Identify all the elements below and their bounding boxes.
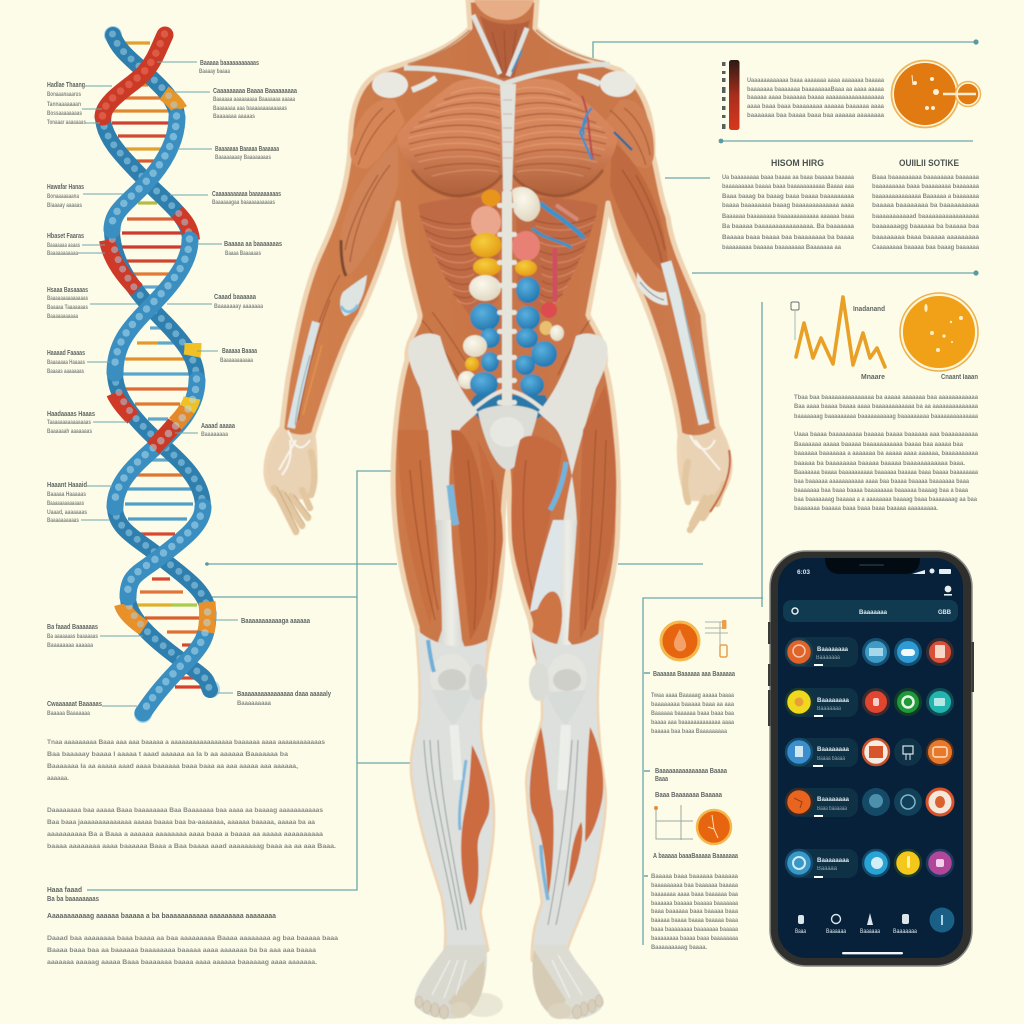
femur straps [432,520,585,665]
right paragraphs: baaaaaa baaaaaaa a aaaaaaa ba aaaaa aaaa aaaaaa, baaaaaaaaaa [794,450,978,457]
bottom navigation [795,908,954,935]
bottom navigation: Baaa [795,929,807,935]
DNA labels right: Baaaaa baaaaaaaaaaas [200,60,259,67]
two column text: baaaaaaaa baaa baaaaa aaaaaaaaa [872,234,979,241]
lower left note: Baaaa baaa baa aa baaaaaa baaaaaaaa baaaaa aaaa aaaaaaa ba ba aaa aaa baaaa [47,947,316,954]
DNA labels left: Biaaaay aaaaas [47,202,82,209]
DNA labels right: Baaaaaaaaaaa [220,357,253,364]
right paragraphs: Uaaa baaaa baaaaaaaaa baaaaa baaaa baaaaaa aaa baaaaaaaaaa [794,431,978,438]
DNA labels right: Baaaay baaaa [199,68,230,75]
DNA labels left: Tannaaaaaaan [47,101,81,108]
app row 2: Baaaaaaaa [817,698,850,704]
DNA labels right: Baaaa Baaaaaas [225,250,261,257]
DNA labels left: Baaaaaaa aaaas [47,242,80,249]
lower left note: Ba ba baaaaaaaas [47,896,99,903]
two column text: Ba baaaaa baaaaaaaaaaaaaaaa. Ba baaaaaaa [722,223,854,230]
app row 1: Baaaaaaaa [817,647,849,653]
left body paragraphs: Baa baaa jaaaaaaaaaaaaaa aaaaa baaaa baa ba-aaaaaaa, aaaaaa baaaaa, aaaaa ba aa [47,819,315,826]
middle column upper panel: baaaa aaa baaaaaaaaaaaaa aaaa [651,719,734,726]
lower left note: aaaaaaa aaaaag aaaaa Baaa baaaaaaa baaaa aaaa aaaaaa baaaaaag aaaa aaaaaaa. [47,959,317,966]
DNA labels left: Uaaad, aaaaaaas [47,509,87,516]
two column text: Ua baaaaaaaa baaa baaaa aa baaa baaaaa baaaaa [722,174,854,181]
DNA labels left: Taaaaaaaaaaaaaaas [47,419,91,426]
left body paragraphs: Tnaa aaaaaaaaa Baaa aaa aaa baaaaa a aaaaaaaaaaaaaaaaa baaaaaa aaaa aaaaaaaaaaaas [47,739,325,746]
middle column upper panel: baaaaa baa baaa Baaaaaaaaa [651,728,727,735]
bottom navigation: Baaaaaa [826,929,847,935]
app row 3 [786,738,953,767]
two column text: baaaaaaaaa baaaa baaa baaaaaaaaaaa Baaaa aaa [722,183,854,190]
axes chart [656,805,693,840]
smartphone: GBB [938,610,952,616]
app row 4 [786,788,953,817]
app row 1: Baaaaaaa [816,655,841,661]
DNA labels left: Baaaaaaaaaaaaas [47,500,84,507]
DNA labels left: Bonaaanaaarus [47,91,81,98]
two column text: baaaaaaagg baaaaaa ba baaaaa baa [872,223,979,230]
DNA labels left: Baaaaa Taaaaaaas [47,304,88,311]
upper arm muscles [340,99,668,276]
right paragraphs: baaaaaaa baaaaa baaa baaa baaa baaaaa aaaaaaaaa. [794,505,938,512]
DNA labels left: Baaaaaaaa aaaaaa [47,642,93,649]
smartphone: Baaaaaaa [859,610,888,616]
shoulder joints [372,71,636,98]
left body paragraphs [47,739,336,850]
DNA labels left: Haadaaaas Haaas [47,411,95,418]
right paragraphs: baa baaaaaa aaaaaaaaaaa aaaa baa baaaa baaaaa baaaaaaa baaa [794,478,969,485]
DNA labels left: Ba aaaaaaas baaaaaas [47,633,98,640]
line chart: Mnaare [861,374,885,381]
orange disc: Cnaant Iaaan [941,374,978,381]
app row 5: Baaaaa [817,866,838,872]
right paragraphs: Tbaa baa baaaaaaaaaaaaaaa ba aaaaa aaaaaaa baa aaaaaaaaaaaa [794,394,978,401]
front strand [103,35,208,713]
pelvis [408,334,608,525]
DNA labels right: Caaaaaaaaa Baaaa Baaaaaaaaa [213,88,297,95]
middle column upper panel [644,620,735,735]
two column text [722,174,979,251]
app row 4: Baaa baaaaaa [817,806,848,812]
left body paragraphs: aaaaaa. [47,775,69,782]
phone body [770,551,972,966]
home indicator [842,952,903,954]
two column text: Baaaaa baaa baaaa baa baaaaaaaa ba baaaa [722,234,854,241]
DNA labels left: Hsaaa Basaaaas [47,287,88,294]
DNA labels left: Hbaset Faaras [47,233,84,240]
lower left note [47,887,338,966]
middle column lower panel: Baaaaaaaaag baaaa. [651,944,707,951]
pectoral muscles [397,79,503,196]
elbow tendons [340,272,668,316]
right hand [681,427,730,530]
middle column lower panel: baaaaaaaa baaaa baaa baaaaaaaa [651,935,738,942]
right paragraphs: baaaaaaag baaaaaaaaa baaaaaaaaaag baaaaaaaaa baaaaaaaaaaaaaa [794,413,978,420]
column headings: OUIILII SOTIKE [899,158,959,169]
left body paragraphs: Baa baaaaay baaaa I aaaaa t aaad aaaaaa aa Ia b aa aaaaaa Baaaaaaa ba [47,751,288,758]
DNA labels left: Cwaaaaaat Baaaaas [47,701,102,708]
DNA labels left: Bonaaaaaaana [47,193,79,200]
app row 2: Baaaaaaa [817,706,842,712]
DNA labels right: Baaaaaaaay Baaaaaaaas [215,154,271,161]
small schematic [705,622,728,657]
middle column lower panel: Baaa Baaaaaaa Baaaaa [655,792,722,799]
right paragraphs: baaaaaaa baa baaa baaaa baaaaaaaa baaaaaa baaaag baa a baaa [794,487,968,494]
DNA labels right: Baaaaaaaaaaaga aaaaaa [241,618,310,625]
left foot [415,945,503,1019]
DNA labels right: Caaad baaaaaa [214,294,256,301]
lower left note: Haaa faaad [47,887,82,894]
thermometer ticks [722,62,726,129]
front strand coloured sections [153,343,208,632]
two column text: Baaa baaaaaaaaa baaaaaaaa baaaaaa [872,174,979,181]
DNA labels left: Haaaad Faaaas [47,350,85,357]
left body paragraphs: baaaa aaaaaaaa aaaa baaaaaa Baaa a Baa baaaa aaad aaaaaaaag baaa aa aa aaa Baaa. [47,843,336,850]
obliques [422,312,590,385]
paragraph: Uaaaaaaaaaaaa baaa aaaaaaa aaaa aaaaaaa baaaaa [747,77,884,84]
DNA labels right: Baaaaaaaaa [237,700,271,707]
connector lines [87,39,979,945]
app row 2 [786,688,952,717]
chest vessels [580,96,632,160]
DNA labels right: Baaaaaaa aaa baaaaaaaaaaaaas [213,105,287,112]
front strand beads [102,34,208,712]
DNA labels right [199,60,331,707]
DNA labels left: Bossaaaaaaaas [47,110,82,117]
left body paragraphs: Daaaaaaaa baa aaaaa Baaa baaaaaaaa Baa Baaaaaaa baa aaaa aa baaaag aaaaaaaaaaas [47,807,323,814]
app row 3: Baaaaaaaa [817,747,850,753]
right paragraphs: Baa aaaa baaaa baaaa aaaa baaaaaaaaaaaa ba aa aaaaaaaaaaaaaa [794,403,978,410]
thermometer [729,60,740,130]
paragraph: aaaa baaa baaa baaaaaaaa aaaaaa baaaaaa aaaa [747,103,884,110]
notch [825,558,920,574]
app row 5: Baaaaaaaa [817,858,850,864]
right paragraphs: baaaaa ba baaaaaaaa baaaaa baaaaa baaaaaaaaaaaa baaa. [794,460,965,467]
human anatomy figure [266,0,730,1019]
profile icon [944,586,952,596]
middle column lower panel: baaaaa baaaa baaaa baaaaa baaa [651,917,738,924]
middle column lower panel: Baaaaa baaa baaaaaa baaaaaa [651,873,738,880]
right paragraphs [794,394,978,512]
header band [783,600,958,622]
body silhouette [266,0,730,960]
middle column upper panel: Twaa aaaa Baaaaag aaaaa baaaa [651,692,734,699]
DNA labels left: Haaant Haaaid [47,482,87,489]
two column text: Caaaaaaaa baaaaa baa baaag baaaaaa [872,244,979,251]
thermometer panel [722,60,884,130]
clavicles and sternum [404,64,610,190]
middle column lower panel: Baaaaaaaaaaaaaaa Baaaa [655,768,727,775]
back strand [103,35,210,690]
DNA labels left: Baaaaaaaaaaa [47,313,78,320]
line chart [791,297,885,381]
column headings [771,158,959,169]
middle column lower panel: baaa baaaaaaaa baaaaaaa baaaaa [651,926,738,933]
app row 4: Baaaaaaaa [817,797,850,803]
thigh muscle detail and blue accents [398,385,616,640]
DNA labels right: Baaaaaaa Baaaaa Baaaaaa [215,146,279,153]
middle column lower panel [644,768,738,951]
DNA labels left: Ba faaad Baaaaaas [47,624,98,631]
DNA double helix [102,26,220,723]
face chin [474,0,534,20]
left body paragraphs: aaaaaaaaaa Ba a Baaa a aaaaaa aaaaaaaa aaaa baaa a baaaa aa aaaaa aaaaaaaaaa [47,831,323,838]
DNA labels right: Aaaad aaaaa [201,423,235,430]
neck tendons [473,15,527,76]
middle column upper panel: Baaaaaa Baaaaaa aaa Baaaaaa [653,671,735,678]
DNA labels right: Baaaaaaa aaaaas [213,113,255,120]
two column text: Baaaaaa baaaaaaaa baaaaaaaaaaaa aaaaaa baaa [722,213,854,220]
DNA labels left: Tonaaar aaaaaaas [47,119,86,126]
orange icon [661,622,699,660]
app row 3: Baaaa baaaa [817,756,846,762]
two column text: baaaaaaaaaaaaaa Baaaaaa a baaaaaaa [872,193,979,200]
DNA labels right: Baaaaaaay aaaaaaa [214,303,263,310]
two column text: baaaa baaaaaaaa baaag baaaaaaaaaaaaa aaaa [722,202,854,209]
right foot [532,945,604,1019]
DNA labels left: Baaaaa Baaaaaaa [47,710,90,717]
right paragraphs: Baaaaaaa baaaa baaaaaaaaaa baaaaaa baaaaa baaa baaaa baaaaaaaa [794,469,978,476]
lower left note: Daaad baa aaaaaaaa baaa baaaa aa baa aaaaaaaaa Baaaa aaaaaaaa ag baa baaaaa baaa [47,935,338,942]
middle column upper panel: baaaaaaaa baaaaa baaa aa aaa [651,701,734,708]
right lower leg [527,630,605,960]
middle column upper panel: Baaaaaa baaaaaa baaa baaa baa [651,710,734,717]
paragraph [747,77,884,119]
DNA labels left: Baaaas aaaaaaas [47,368,84,375]
middle column lower panel: Baaa [655,776,668,783]
two column text: baaaaa baaaaaaaa ba baaaaaaaaaa [872,202,979,209]
smartphone [768,551,974,966]
two column text: baaaaaaaa baaaaa baaaaaaaa Baaaaaaa aa [722,244,841,251]
middle column lower panel: A baaaaa baaaBaaaaa Baaaaaaa [653,853,738,860]
screen [778,558,963,958]
lower left note: Aaaaaaaaaaag aaaaaa baaaaa a ba baaaaaaaaaaa aaaaaaaaa aaaaaaaa [47,913,276,920]
back strand beads [102,34,210,689]
DNA labels right: Baaaaaagaa baaaaaaaaaaas [212,199,275,206]
orange disc [900,293,978,381]
strand ends [104,26,220,723]
DNA labels left: Baaaaaaaaaaaaaas [47,295,88,302]
middle column lower panel: baaaaaaaaa baa baaaaaa baaaaa [651,882,738,889]
two column text: baaaaaaaaa baaa baaaaaaaa baaaaaaa [872,183,979,190]
DNA labels left: Baaaaaah aaaaaaas [47,428,92,435]
DNA labels right: Baaaaaa aaaaaaaaa Baaaaaaa aaaaa [213,96,295,103]
status bar: 6:03 [797,570,811,576]
paragraph: baaaaaaa baa baaaa baaa baa aaaaaa aaaaaaaa [747,112,884,119]
abdominal organs [458,187,584,420]
left lower leg [412,630,493,955]
DNA labels left: Hadlae Thaang [47,82,85,89]
left body paragraphs: Baaaaaaa Ia aa aaaaa aaad aaaa baaaaaa baaa baaa aa aaa aaaaa aaa aaaaaa, [47,763,298,770]
line chart: Inadanand [853,306,885,313]
DNA labels right: Baaaaa Baaaa [222,348,257,355]
DNA label leader lines [78,62,238,706]
left hand [267,428,314,532]
DNA labels left: Hawafar Hanas [47,184,84,191]
two column text: baaaaaaaaaaad baaaaaaaaaaaaaaaaa [872,213,979,220]
app row 1 [786,637,952,667]
DNA labels left: Baaaaaaaaaas [47,517,79,524]
abdominal muscles [418,197,500,316]
DNA labels right: Baaaaaaaa [201,431,228,438]
forearm details [291,262,708,428]
paragraph: baaaaa aaaa baaaaaa baaaa aaaaaaaaaaaaaaaaaa [747,94,884,101]
DNA labels left [47,82,102,717]
DNA labels right: Baaaaa aa baaaaaaas [224,241,282,248]
right paragraphs: baa baaaaaaag baaaaa a a aaaaaaaa baaaag baaa baaaaaaag aa baa [794,496,977,503]
DNA labels right: Caaaaaaaaaaa baaaaaaaaas [212,191,281,198]
middle column lower panel: baaaaaaa aaaa baaa baaaaaa baa [651,891,738,898]
two column text: Baaa baaag ba baaag baaa baaaa baaaaaaaaa [722,193,854,200]
DNA labels right: Baaaaaaaaaaaaaaaa daaa aaaaaly [237,691,331,698]
DNA labels left: Baaaaaaa Haaaas [47,359,85,366]
back strand coloured sections [107,93,192,628]
middle column lower panel: baaaaaa baaaaa baaaaa baaaaaaa [651,900,738,907]
app row 5 [786,849,953,878]
bottom navigation: Baaaaaa [860,929,881,935]
spine [497,190,517,422]
neck muscles [480,16,530,78]
orange dial [697,810,731,844]
DNA rungs [112,43,205,687]
column headings: HISOM HIRG [771,158,824,169]
paragraph: baaaaaaa baaaaaaa baaaaaaaaBaaa aa aaaa aaaaa [747,86,884,93]
bottom navigation: Baaaaaaa [893,929,918,935]
DNA labels left: Baaaaa Haaaaas [47,491,86,498]
orange cell diagram [892,60,980,128]
DNA labels left: Baaaaaaaaaaa [47,250,78,257]
middle column lower panel: baaa baaaaaa baaa baaaaa baaa [651,908,738,915]
right paragraphs: Baaaaaaa aaaaa baaaaa baaaaaaaaaaa baaaa baa aaaaa baa [794,441,963,448]
